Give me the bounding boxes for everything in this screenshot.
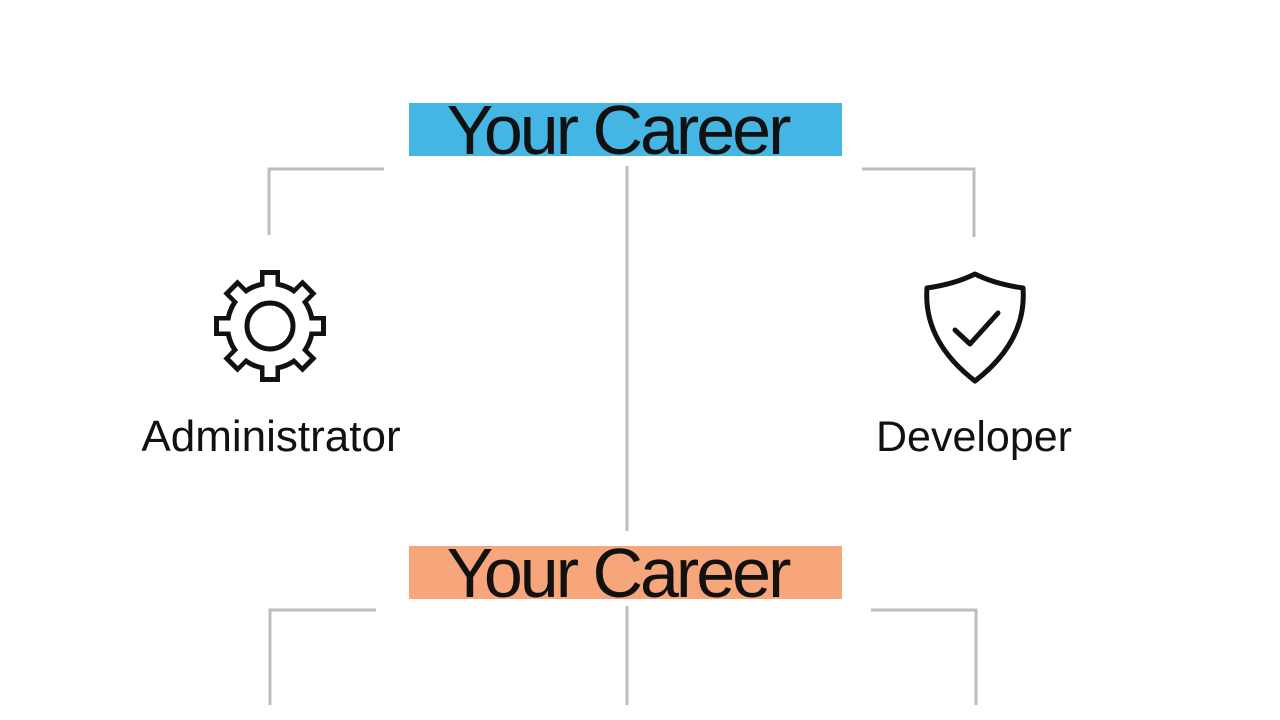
label: Administrator: Administrator [141, 412, 401, 461]
title: bottom bar: Your Career [447, 534, 788, 612]
title: top bar: Your Career [447, 91, 788, 169]
title: top bar [409, 103, 842, 156]
label: Developer: Developer [876, 413, 1072, 461]
icon: shield check [924, 272, 1026, 384]
icon: gear [214, 270, 326, 382]
title: bottom bar [409, 546, 842, 599]
